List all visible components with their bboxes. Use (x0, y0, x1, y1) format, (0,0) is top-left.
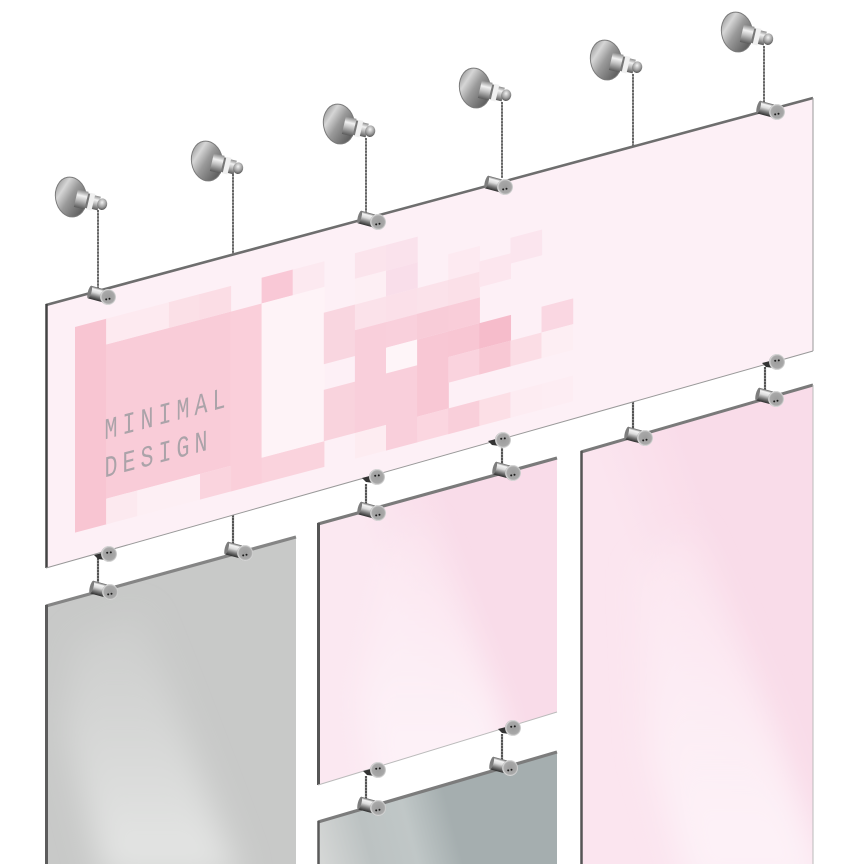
banner top clamps (86, 100, 785, 305)
panel: pink middle (318, 458, 557, 800)
panel: grey lower-left (46, 537, 296, 864)
panel: grey lower-middle (318, 752, 557, 864)
wall standoffs (52, 10, 775, 219)
pixel mosaic (75, 196, 573, 533)
banner text: MINIMAL: MINIMAL (104, 381, 230, 449)
bottom edge cable grips (94, 354, 785, 778)
lower panel clamps (88, 387, 784, 816)
cables: wall standoffs to banner (98, 46, 764, 288)
cables: between panels (98, 367, 765, 802)
panel: banner (46, 98, 813, 568)
panel: pink right (581, 385, 830, 864)
banner text: DESIGN: DESIGN (104, 424, 212, 487)
